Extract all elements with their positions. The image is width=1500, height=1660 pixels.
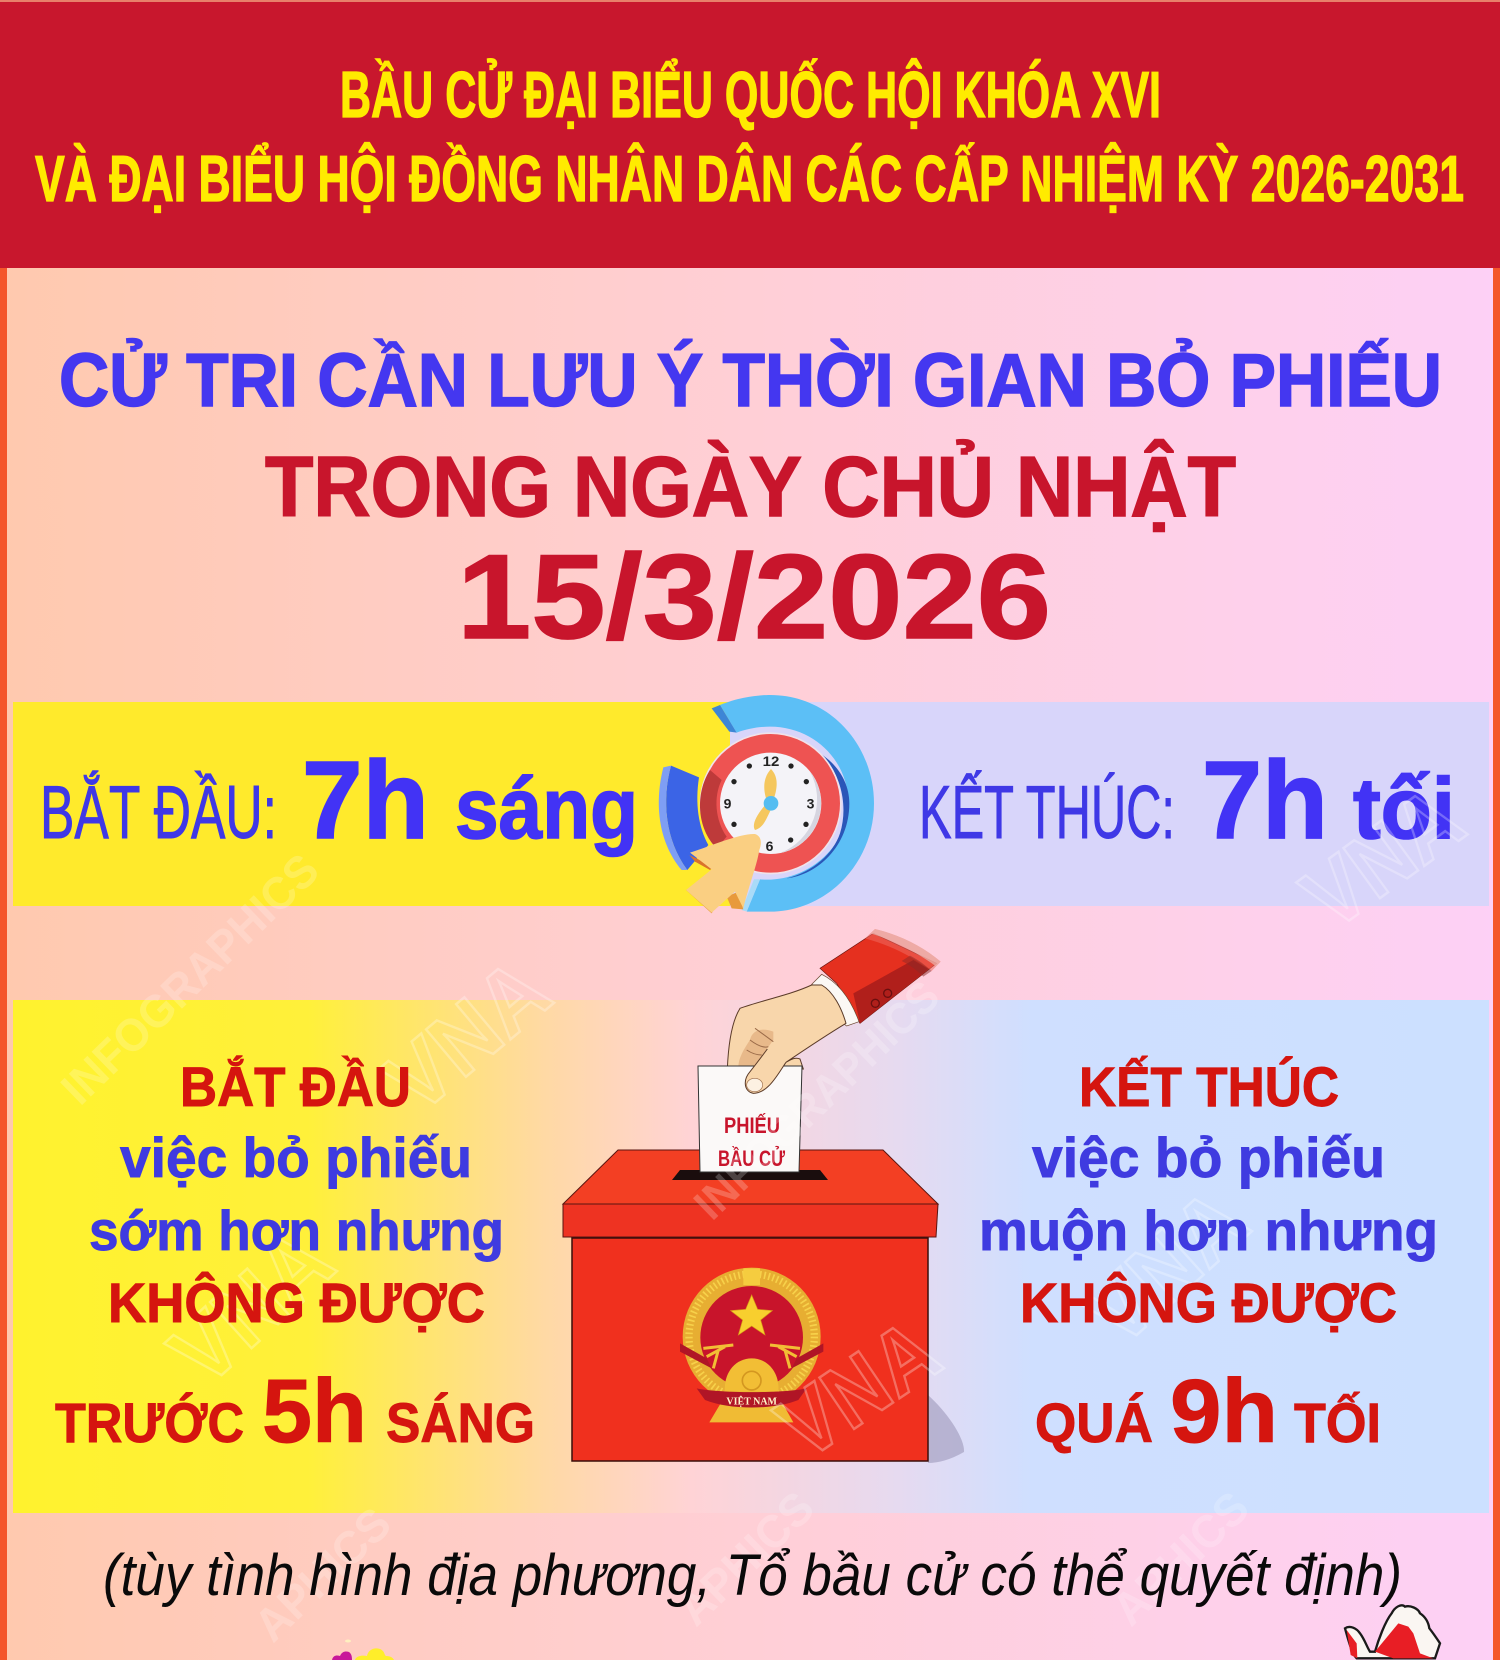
panel: voting hours band bbox=[13, 702, 1489, 906]
left line not allowed: KHÔNG ĐƯỢC bbox=[108, 1271, 485, 1334]
end time 7h: 7h bbox=[1202, 739, 1328, 862]
icon: clock with arrow bbox=[659, 695, 874, 913]
curled fingers bbox=[738, 1030, 773, 1068]
icon: clock with arrow: 6 bbox=[766, 838, 774, 854]
icon: ballot paper: BẦU CỬ bbox=[718, 1146, 786, 1171]
right time 9h: 9h bbox=[1170, 1362, 1278, 1462]
right line evening: TỐI bbox=[1294, 1391, 1381, 1454]
sleeve bbox=[820, 933, 937, 1023]
icon: cursor arrow bbox=[686, 883, 718, 913]
icon: star bbox=[731, 1295, 772, 1335]
panel: extended voting band bbox=[13, 1000, 1489, 1513]
left heading start: BẮT ĐẦU bbox=[180, 1055, 411, 1118]
icon: thumb bbox=[745, 1043, 786, 1093]
right line later: muộn hơn nhưng bbox=[979, 1199, 1438, 1262]
palm bbox=[727, 985, 846, 1069]
panel: left text block bbox=[55, 1055, 535, 1462]
watermarks over ballot box bbox=[685, 972, 957, 1479]
watermarks: APHICS bbox=[667, 1481, 824, 1635]
icon: ballot paper: PHIẾU bbox=[724, 1113, 780, 1138]
left line earlier: sớm hơn nhưng bbox=[89, 1199, 504, 1262]
left time 5h: 5h bbox=[262, 1362, 367, 1462]
start label: BẮT ĐẦU: bbox=[40, 770, 277, 854]
icon: clock ring bbox=[700, 732, 842, 874]
watermarks: INFOGRAPHICS bbox=[51, 843, 329, 1114]
date: 15/3/2026 bbox=[457, 530, 1051, 664]
icon: box shadow bbox=[928, 1395, 964, 1463]
right line not allowed: KHÔNG ĐƯỢC bbox=[1020, 1271, 1397, 1334]
watermarks over ballot box: INFOGRAPHICS bbox=[685, 972, 949, 1229]
watermarks over ballot box: VNA bbox=[760, 1301, 957, 1479]
icon: banner bbox=[697, 1388, 807, 1407]
icon: emblem base bbox=[709, 1402, 793, 1422]
icon: state emblem: VIỆT NAM bbox=[726, 1394, 778, 1407]
icon: clock with arrow: 9 bbox=[724, 795, 732, 811]
watermarks: VNA bbox=[151, 1210, 352, 1405]
icon: cog bbox=[725, 1358, 778, 1392]
icon: hand and sleeve bbox=[727, 929, 941, 1069]
icon: decorative flower bbox=[332, 1640, 394, 1660]
left line before: TRƯỚC bbox=[55, 1391, 244, 1454]
watermarks: APHICS bbox=[244, 1497, 401, 1651]
watermarks: APHICS bbox=[1102, 1481, 1259, 1635]
right line past: QUÁ bbox=[1035, 1391, 1153, 1454]
icon: side ribbons bbox=[680, 1343, 823, 1368]
header banner bbox=[0, 0, 1500, 268]
icon: decorative red and white hand bbox=[1345, 1605, 1440, 1658]
footnote: (tùy tình hình địa phương, Tổ bầu cử có thể quyết định) bbox=[103, 1543, 1402, 1608]
icon: clock face bbox=[720, 753, 821, 854]
main heading: on Sunday: TRONG NGÀY CHỦ NHẬT bbox=[265, 439, 1236, 535]
icon: state emblem bbox=[680, 1268, 823, 1422]
watermarks: VNA bbox=[1285, 768, 1481, 949]
right line voting: việc bỏ phiếu bbox=[1032, 1126, 1385, 1189]
icon: clock with arrow: 3 bbox=[807, 795, 815, 811]
icon: clock with arrow: 12 bbox=[763, 753, 780, 769]
icon: blue arc bbox=[720, 695, 874, 912]
end label: KẾT THÚC: bbox=[919, 770, 1175, 854]
icon: clock hands bbox=[764, 769, 777, 798]
cuff bbox=[812, 974, 859, 1026]
start time morning: sáng bbox=[455, 761, 638, 857]
watermarks: VNA bbox=[367, 940, 569, 1132]
left line morning: SÁNG bbox=[386, 1391, 535, 1454]
watermarks bbox=[51, 768, 1481, 1651]
right heading end: KẾT THÚC bbox=[1079, 1055, 1339, 1118]
icon: dark blue segment bbox=[666, 766, 708, 870]
icon: box lid top bbox=[563, 1150, 938, 1204]
start time 7h: 7h bbox=[302, 739, 429, 862]
icon: rice sprigs bbox=[703, 1345, 800, 1368]
end time evening: tối bbox=[1353, 761, 1455, 857]
icon: ballot slot bbox=[672, 1170, 828, 1180]
icon: lid front bbox=[563, 1204, 938, 1237]
watermarks: VNA bbox=[1066, 1170, 1267, 1365]
icon: ballot paper bbox=[698, 1066, 802, 1172]
panel: right text block bbox=[979, 1055, 1438, 1462]
left line voting: việc bỏ phiếu bbox=[120, 1126, 472, 1189]
icon: box body bbox=[572, 1238, 928, 1461]
